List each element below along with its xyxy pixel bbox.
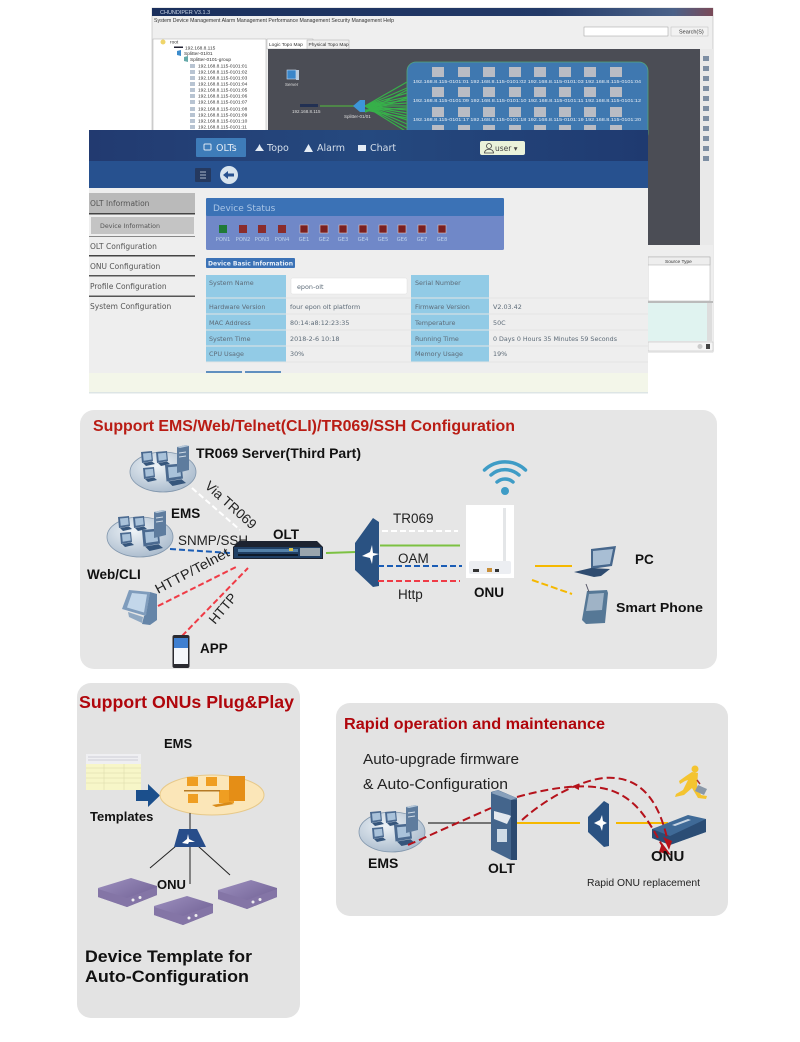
caption: Device Template for [85,947,252,966]
label: PC: PC [635,552,654,567]
link: App to OLT [182,568,248,636]
icon: wifi [484,462,526,495]
device status panel [206,198,504,250]
device information table: Running Time [415,335,459,343]
port labels: GE8 [437,237,448,243]
sidebar menu [89,193,195,311]
label: ONU: ONU [157,877,186,892]
ONU address labels: 192.168.8.115-0101:17 192.168.8.115-0101:18 192.168.8.115-0101:19 192.168.8.115-0101:20 [413,117,642,122]
menu bar: System Device Management Alarm Management Performance Management Security Management Help [154,18,394,24]
port labels: GE7 [417,237,427,243]
label: Web/CLI: Web/CLI [87,567,141,582]
device information table: epon-olt [297,283,324,291]
device tree: 192.168.8.115-0101:01 [198,64,248,70]
splitter and green links [292,82,407,132]
arrow: templates to EMS [136,784,160,807]
device tree: 192.168.8.115-0101:10 [198,118,248,124]
link: Web to OLT [158,566,238,606]
label: EMS: EMS [164,736,192,751]
port icons [219,225,446,233]
icon: running technician [675,766,707,799]
device information table: MAC Address [209,319,251,327]
device tree: 192.168.8.115-0101:07 [198,100,248,106]
device tree: 192.168.8.115-0101:11 [198,124,247,130]
splitter and green links: 192.168.8.115 [292,109,321,114]
device tree: 192.168.8.115-0101:06 [198,94,248,100]
panel: rapid operation [336,703,728,916]
icon: TR069 server cluster [130,445,196,492]
link: ONU to PC [535,565,572,567]
topology tabs [267,39,349,49]
caption [85,947,252,986]
link: HTTP [378,580,460,582]
device information table: 30% [290,350,304,358]
heading: Rapid operation and maintenance [344,716,605,733]
link: data [380,544,460,546]
icon: EMS cluster [107,510,173,557]
port labels: GE3 [338,237,348,243]
device basic information tag: Device Basic Information [208,260,293,268]
label: smart phone: Smart Phone [616,600,703,615]
label: APP: APP [200,641,228,656]
top navigation bar: Chart [370,143,396,154]
icon: splitter small [174,829,206,847]
device tree: 192.168.8.115-0101:08 [198,106,248,112]
panel: configuration methods [80,410,717,669]
device tree: 192.168.8.115-0101:09 [198,112,248,118]
device information table: System Time [209,335,251,343]
text: auto upgrade: Auto-upgrade firmware [363,752,519,768]
link: OAM [378,565,462,567]
sidebar menu: OLT Configuration [90,242,157,251]
port labels: PON3 [255,237,269,243]
icon: EMS network orange [160,775,264,815]
panel: front web management window [89,130,648,394]
icon: splitter [355,518,379,587]
server icon: Server [285,82,299,87]
device basic information tag [206,258,295,268]
heading: Support ONUs Plug&Play [79,692,294,712]
port labels: GE1 [299,237,309,243]
ONU address labels [413,79,642,122]
device information table: 2018-2-6 10:18 [290,335,339,343]
dashed control paths [408,778,668,852]
port labels: PON2 [236,237,250,243]
device information table: Temperature [414,319,456,327]
icon: handheld phone [582,584,608,624]
port labels [216,237,448,243]
icon: template spreadsheet [86,754,141,790]
link: TR069 to OLT [192,488,240,530]
device information table: 50C [493,319,506,327]
search box [584,27,708,36]
icon: OLT tower [491,790,517,860]
link: OLT to ONU fibre [517,822,668,824]
server icon [285,70,299,87]
port labels: PON1 [216,237,230,243]
sidebar menu: OLT Information [90,199,150,208]
device information table: System Name [209,279,254,287]
label: SNMP/SSH: SNMP/SSH [178,532,248,548]
device information table: 0 Days 0 Hours 35 Minutes 59 Seconds [493,335,618,343]
device information table: four epon olt platform [290,303,360,311]
link: ONU to phone [532,580,572,594]
icons: purple ONU devices [98,878,277,925]
port labels: GE5 [378,237,388,243]
icon: laptop [574,546,616,577]
device tree: Splitter-01/01 [184,51,213,57]
device information table: 19% [493,350,507,358]
lower right alarm panels [648,245,713,352]
device status panel: Device Status [213,204,276,214]
label: OLT: OLT [488,860,515,876]
sidebar menu: ONU Configuration [90,262,160,271]
device information table: Hardware Version [209,303,265,311]
label: ONU: ONU [474,585,504,600]
label: templates: Templates [90,809,153,824]
label: HTTP/Telnet: HTTP/Telnet [152,545,232,597]
device tree: Splitter-0101-group [190,57,231,63]
icon: splitter [588,801,609,847]
port labels: GE6 [397,237,408,243]
device information table: 80:14:a8:12:23:35 [290,319,349,327]
port labels: PON4 [275,237,290,243]
device tree [153,39,266,131]
ONU address labels: 192.168.8.115-0101:09 192.168.8.115-0101:10 192.168.8.115-0101:11 192.168.8.115-0101:12 [413,98,642,103]
label: HTTP: HTTP [206,590,240,627]
ONU address labels: 192.168.8.115-0101:01 192.168.8.115-0101:02 192.168.8.115-0101:03 192.168.8.115-0101:04 [413,79,642,84]
panel: back EMS software window [152,8,713,352]
lower right alarm panels: Source Type [665,259,692,265]
label: EMS: EMS [368,855,398,871]
text: auto upgrade: & Auto-Configuration [363,777,508,793]
icon: OLT chassis [233,541,323,559]
window title bar: CHUNDIPER V3.1.3 [160,10,210,16]
ONU group panel [407,62,648,142]
sidebar menu: System Configuration [90,302,171,311]
sidebar menu: Device Information [100,223,160,230]
icon: blue ONU [652,815,706,845]
label: TR069: TR069 [393,511,434,526]
label: OLT: OLT [273,527,300,542]
text: auto upgrade [363,752,519,793]
topology canvas [268,49,700,245]
top navigation bar [89,130,648,161]
secondary toolbar [89,161,648,188]
link lines to ONUs [150,813,230,884]
device information table [206,275,648,362]
link: EMS to OLT [428,822,491,824]
device tree: 192.168.8.115-0101:05 [198,88,248,94]
top navigation bar: OLTs [216,143,237,154]
label: ONU: ONU [651,848,684,865]
device tree: 192.168.8.115-0101:02 [198,70,248,76]
label: EMS: EMS [171,506,200,521]
device information table: Memory Usage [415,350,463,358]
device tree: 192.168.8.115-0101:04 [198,82,248,88]
device information table: Serial Number [415,279,461,287]
icon: ONU router [466,505,514,578]
label: via TR069: Via TR069 [202,478,260,532]
ONU icon rows [432,67,622,133]
heading: Support EMS/Web/Telnet(CLI)/TR069/SSH Configuration [93,418,515,435]
top navigation bar: Alarm [317,143,345,154]
link: OLT to splitter [326,552,356,553]
window title bar [152,8,713,16]
label: Http: Http [398,587,423,602]
top navigation bar: Topo [266,143,289,154]
link: TR069 [382,530,458,532]
right tool strip [700,49,713,245]
topology tabs: Physical Topo Map [308,42,349,48]
link: EMS to OLT [170,549,230,553]
port labels: GE2 [319,237,329,243]
port labels: GE4 [358,237,369,243]
top navigation bar: user ▾ [495,144,518,153]
icon: EMS cluster [359,805,425,852]
device information table: V2.03.42 [493,303,522,311]
arrowheads [573,784,672,855]
sidebar menu: Profile Configuration [90,282,167,291]
device information table: Firmware Version [415,303,470,311]
caption: Auto-Configuration [85,967,249,986]
panel: plug and play [77,683,300,1018]
device tree: root [170,40,179,46]
device tree: 192.168.8.115 [185,46,216,52]
label: OAM: OAM [398,551,429,566]
label: TR069 server: TR069 Server(Third Part) [196,445,361,461]
device information table: CPU Usage [209,350,244,358]
icon: smartphone [172,635,190,668]
search box: Search(S) [679,30,704,36]
device tree: 192.168.8.115-0101:03 [198,76,248,82]
label: rapid ONU replacement: Rapid ONU replacement [587,877,700,889]
icon: desktop computer [122,590,157,625]
action buttons and footer [89,371,648,394]
splitter and green links: Splitter-01/01 [344,114,371,119]
topology tabs: Logic Topo Map [269,42,303,48]
